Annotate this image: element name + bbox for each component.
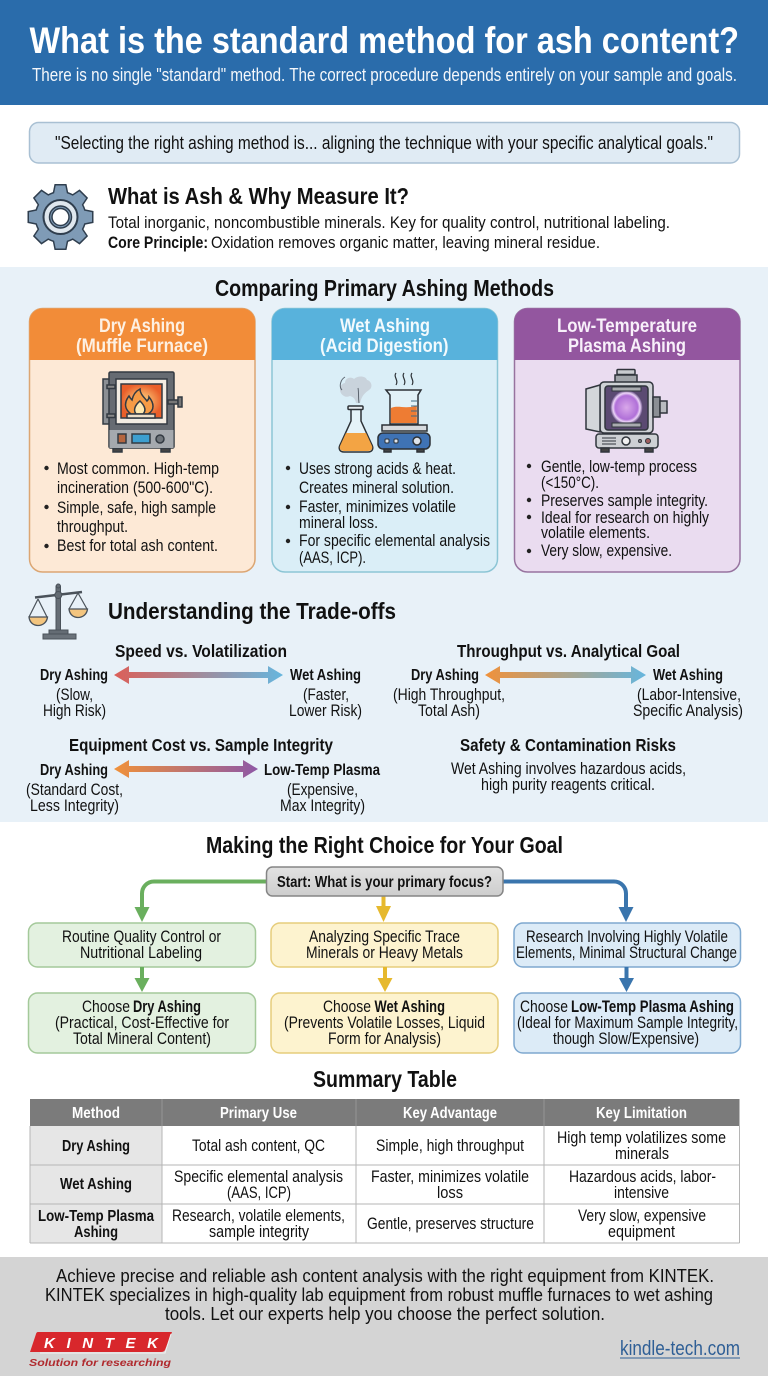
trade-off: speed vs volatilization: (Faster, (303, 686, 349, 704)
list: wet ashing: mineral loss. (299, 513, 378, 532)
list: wet ashing: For specific elemental analysis (299, 531, 490, 550)
table row: plasma ashing: Ashing (74, 1224, 118, 1241)
trade-off: throughput vs analytical goal: Wet Ashing (653, 667, 723, 684)
table header row: Primary Use (220, 1105, 297, 1122)
trade-off: safety and contamination (451, 735, 686, 794)
flowchart start: Start: What is your primary focus? (277, 874, 492, 891)
heading: trade-offs: Understanding the Trade-offs (108, 598, 396, 624)
table header row: Key Advantage (403, 1105, 497, 1122)
trade-off: throughput vs analytical goal: (High Throughput, (393, 686, 505, 704)
trade-off: equipment cost vs sample integrity: Less Integrity) (30, 797, 119, 815)
table header row (72, 1105, 687, 1122)
table row: wet ashing: Specific elemental analysis (174, 1168, 343, 1186)
flow box: volatile research: Research Involving Highly Volatile (526, 928, 728, 946)
list: dry ashing: Simple, safe, high sample (57, 498, 216, 517)
section: what is ash: Total inorganic, noncombustible minerals. Key for quality control, nutritional labeling. (108, 213, 670, 232)
table row: wet ashing: intensive (614, 1184, 669, 1202)
trade-off: throughput vs analytical goal: Dry Ashing (411, 667, 479, 684)
list: wet ashing: (AAS, ICP). (299, 548, 366, 567)
trade-off: equipment cost vs sample integrity: (Expensive, (287, 781, 358, 799)
list: plasma ashing: Preserves sample integrity. (541, 491, 708, 510)
table row: dry ashing: minerals (615, 1145, 669, 1163)
trade-off: throughput vs analytical goal (393, 641, 743, 720)
flow box: trace minerals: Analyzing Specific Trace (309, 928, 460, 946)
trade-off: equipment cost vs sample integrity (26, 735, 380, 815)
trade-off: speed vs volatilization: Wet Ashing (290, 667, 361, 684)
logo: KINTEK (29, 1332, 172, 1369)
trade-off: equipment cost vs sample integrity: Max Integrity) (280, 797, 365, 815)
table row: wet ashing: (AAS, ICP) (227, 1184, 291, 1202)
flow box: trace minerals: Minerals or Heavy Metals (306, 944, 463, 962)
list: wet ashing: Creates mineral solution. (299, 478, 454, 497)
list: plasma ashing: (<150°C). (541, 473, 599, 492)
list: plasma ashing (527, 457, 709, 560)
table header row: Key Limitation (596, 1105, 687, 1122)
logo: KINTEK: Solution for researching (29, 1357, 172, 1369)
table row: wet ashing: loss (437, 1184, 463, 1202)
trade-off: speed vs volatilization: High Risk) (43, 702, 106, 720)
trade-off: speed vs volatilization: Lower Risk) (289, 702, 362, 720)
summary table (30, 1099, 740, 1243)
icon: plasma chamber (586, 370, 667, 452)
panel: dry ashing (30, 308, 255, 572)
website link: kindle-tech.com (620, 1337, 740, 1360)
trade-off: throughput vs analytical goal: Specific Analysis) (633, 702, 743, 720)
panel: dry ashing: (Muffle Furnace) (76, 335, 208, 357)
section: what is ash: What is Ash & Why Measure It? (108, 183, 409, 209)
result box: wet ashing: Choose (323, 998, 371, 1016)
arrow: equipment cost (114, 760, 258, 778)
result box: wet ashing (271, 993, 498, 1053)
table row: plasma ashing: Gentle, preserves structure (367, 1215, 534, 1233)
list: dry ashing: Most common. High-temp (57, 459, 219, 478)
table row: wet ashing (60, 1168, 716, 1202)
arrow: throughput (485, 666, 646, 684)
footer text: Achieve precise and reliable ash content analysis with the right equipment from KINTEK. (56, 1265, 714, 1286)
panel: low-temperature plasma ashing: Low-Temperature (557, 315, 697, 337)
heading: right choice: Making the Right Choice for Your Goal (206, 832, 563, 858)
trade-off: throughput vs analytical goal: Total Ash) (418, 702, 480, 720)
footer text (45, 1265, 714, 1324)
flow box: volatile research (514, 923, 740, 967)
icon: flask and beaker on hotplate (339, 373, 430, 452)
trade-off: throughput vs analytical goal: Throughput vs. Analytical Goal (457, 641, 680, 661)
trade-off: speed vs volatilization: Dry Ashing (40, 667, 108, 684)
result box: dry ashing: Dry Ashing (133, 998, 201, 1016)
table row: wet ashing: Wet Ashing (60, 1176, 132, 1193)
footer text: tools. Let our experts help you choose the perfect solution. (165, 1303, 605, 1324)
arrow: yellow down (378, 967, 392, 992)
result box: dry ashing: Choose (82, 998, 130, 1016)
trade-off: equipment cost vs sample integrity: Dry Ashing (40, 762, 108, 779)
table row: dry ashing: Dry Ashing (62, 1138, 130, 1155)
flow box: trace minerals (271, 923, 498, 967)
panel: low-temperature plasma ashing: Plasma Ashing (568, 335, 686, 357)
result box: wet ashing: Wet Ashing (374, 998, 445, 1016)
trade-off: equipment cost vs sample integrity: (Standard Cost, (26, 781, 123, 799)
panel: low-temperature plasma ashing (514, 308, 740, 572)
result box: wet ashing: (Prevents Volatile Losses, Liquid (284, 1014, 485, 1032)
trade-off: equipment cost vs sample integrity: Equipment Cost vs. Sample Integrity (69, 735, 333, 755)
flow box: routine QC: Nutritional Labeling (80, 944, 202, 962)
icon: muffle furnace (103, 372, 182, 452)
arrow: start to wet path (376, 895, 391, 922)
header banner (0, 0, 768, 105)
arrow: speed (114, 666, 283, 684)
trade-off: speed vs volatilization: (Slow, (56, 686, 93, 704)
result box: wet ashing: Form for Analysis) (328, 1030, 441, 1048)
trade-off: safety and contamination: high purity reagents critical. (481, 776, 655, 794)
result box: plasma ashing: Choose (520, 998, 568, 1016)
table row: dry ashing: Simple, high throughput (376, 1137, 524, 1155)
table row: plasma ashing: Very slow, expensive (578, 1207, 706, 1225)
table row: plasma ashing: sample integrity (209, 1223, 310, 1241)
icon: gear (28, 184, 94, 250)
panel: dry ashing: Dry Ashing (99, 315, 185, 337)
trade-off: safety and contamination: Safety & Contamination Risks (460, 735, 676, 755)
arrow: green down (134, 967, 150, 992)
table row: dry ashing (62, 1129, 726, 1163)
result box: plasma ashing (514, 993, 740, 1053)
list: wet ashing: Uses strong acids & heat. (299, 459, 456, 478)
trade-off: safety and contamination: Wet Ashing involves hazardous acids, (451, 760, 686, 778)
list: plasma ashing: Gentle, low-temp process (541, 457, 697, 476)
flow box: routine QC: Routine Quality Control or (62, 928, 221, 946)
section: what is ash: Core Principle: (108, 233, 208, 252)
trade-off: equipment cost vs sample integrity: Low-Temp Plasma (264, 762, 380, 779)
icon: balance scale (29, 584, 88, 639)
panel: wet ashing: (Acid Digestion) (320, 335, 448, 357)
table row: plasma ashing: equipment (608, 1223, 675, 1241)
result box: dry ashing (28, 993, 256, 1053)
section: what is ash (108, 183, 670, 252)
trade-off: speed vs volatilization (40, 641, 362, 720)
table row: wet ashing: Faster, minimizes volatile (371, 1168, 529, 1186)
table row: dry ashing: High temp volatilizes some (557, 1129, 726, 1147)
list: plasma ashing: Ideal for research on highly (541, 508, 709, 527)
table row: wet ashing: Hazardous acids, labor- (569, 1168, 716, 1186)
list: wet ashing (286, 459, 490, 567)
heading: summary table: Summary Table (313, 1066, 457, 1092)
table header row: Method (72, 1105, 120, 1122)
arrow: start to plasma path (501, 882, 634, 922)
list: plasma ashing: volatile elements. (541, 523, 650, 542)
table row: plasma ashing (38, 1207, 706, 1241)
flowchart start (266, 867, 503, 896)
list: wet ashing: Faster, minimizes volatile (299, 497, 456, 516)
background band (0, 267, 768, 822)
result box: dry ashing: (Practical, Cost-Effective for (55, 1014, 229, 1032)
list: plasma ashing: Very slow, expensive. (541, 541, 672, 560)
table row: plasma ashing: Low-Temp Plasma (38, 1208, 154, 1225)
footer band (0, 1257, 768, 1376)
trade-off: speed vs volatilization: Speed vs. Volatilization (115, 641, 287, 661)
table row: plasma ashing: Research, volatile elements, (172, 1207, 345, 1225)
arrow: blue down (619, 967, 634, 992)
flow box: routine QC (28, 923, 256, 967)
arrow: start to dry path (134, 882, 268, 922)
list: dry ashing (44, 459, 219, 555)
panel: wet ashing: Wet Ashing (340, 315, 430, 337)
panel: wet ashing (272, 308, 498, 572)
quote callout (30, 122, 740, 163)
heading: comparing methods: Comparing Primary Ashing Methods (215, 275, 554, 301)
result box: dry ashing: Total Mineral Content) (73, 1030, 211, 1048)
section: what is ash: Oxidation removes organic matter, leaving mineral residue. (211, 233, 600, 252)
table row: dry ashing: Total ash content, QC (192, 1137, 325, 1155)
list: dry ashing: Best for total ash content. (57, 536, 218, 555)
list: dry ashing: throughput. (57, 517, 128, 536)
logo: KINTEK: KINTEK (44, 1335, 159, 1352)
list: dry ashing: incineration (500-600"C). (57, 478, 213, 497)
result box: plasma ashing: though Slow/Expensive) (553, 1030, 699, 1048)
trade-off: throughput vs analytical goal: (Labor-Intensive, (637, 686, 741, 704)
